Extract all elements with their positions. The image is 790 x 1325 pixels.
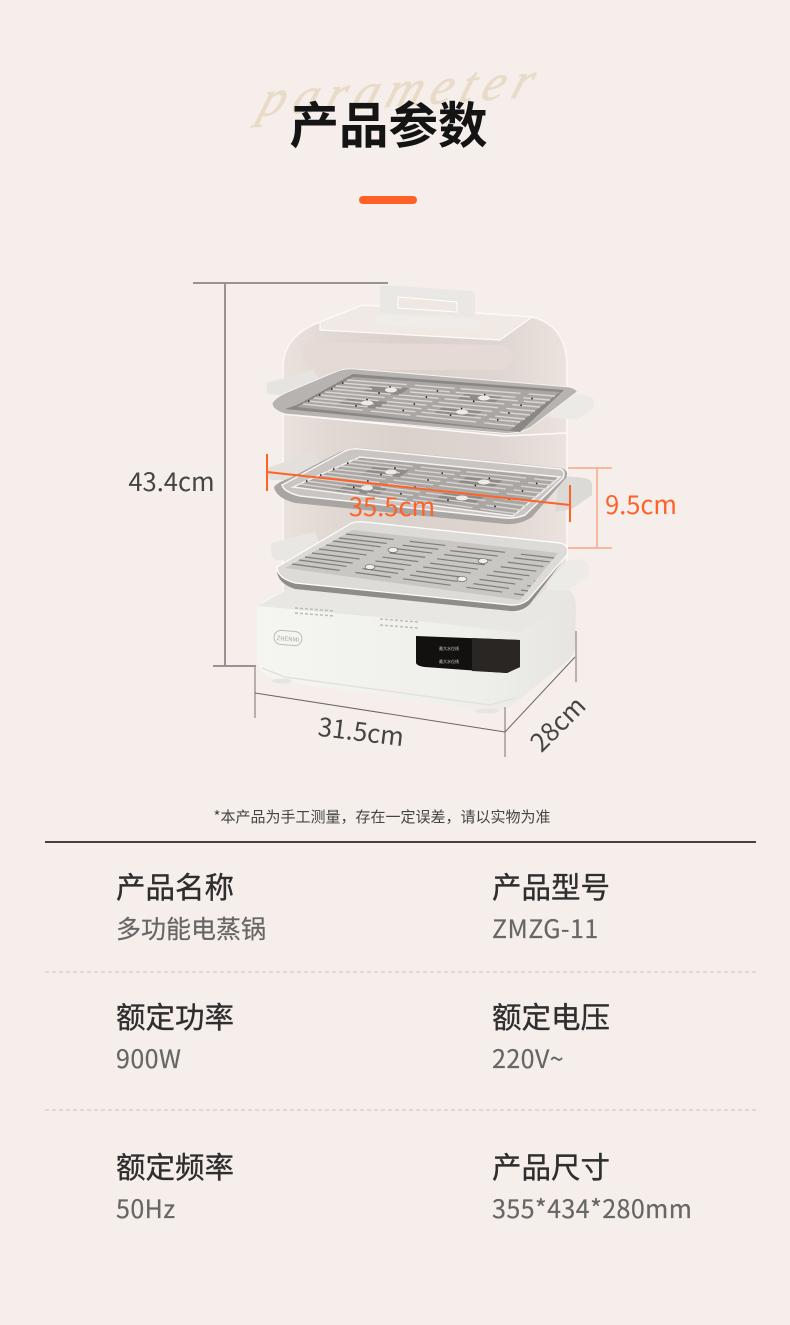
spec: rated frequency: 50Hz [116, 1190, 176, 1226]
water tank window [416, 636, 520, 673]
plate pin dots [306, 463, 551, 510]
height dimension 43.4cm: 43.4cm [128, 462, 215, 499]
inner width dimension 35.5cm [267, 454, 570, 524]
plate slots [292, 534, 554, 595]
inner width dimension 35.5cm: 35.5cm [349, 487, 435, 524]
accent bar [359, 196, 417, 204]
brand badge [273, 630, 303, 646]
lower front lid edge [283, 414, 567, 436]
tier height dimension 9.5cm: 9.5cm [605, 486, 677, 522]
spec: model: 产品型号 [492, 865, 610, 907]
tray plate [297, 377, 560, 430]
spec: rated voltage: 额定电压 [492, 995, 610, 1037]
title block [249, 52, 551, 158]
lid top surface [320, 305, 532, 340]
left grip [267, 370, 320, 395]
plate hole panels [336, 467, 503, 504]
spec: product size: 355*434*280mm [492, 1190, 692, 1226]
spec: product name: 产品名称 [116, 865, 234, 907]
plate holes [361, 388, 490, 414]
right grip [547, 559, 589, 590]
right grip [555, 476, 592, 512]
tier 1 tray [267, 369, 594, 433]
top divider [45, 841, 756, 843]
script watermark: parameter [249, 52, 551, 128]
steamer product illustration [257, 285, 594, 714]
base lower trim [262, 668, 515, 705]
steamer body and lid dome [283, 305, 567, 600]
measurement note: *本产品为手工测量，存在一定误差，请以实物为准 [213, 806, 551, 827]
spec: rated frequency [116, 1145, 234, 1226]
spec: product size [492, 1145, 692, 1226]
spec: product size: 产品尺寸 [492, 1145, 610, 1187]
lid handle [375, 285, 480, 330]
plate hole panels [336, 385, 503, 417]
tray rim [277, 522, 568, 611]
tier 2 tray [267, 448, 592, 524]
left grip [267, 452, 320, 480]
depth dimension 28cm: 28cm [521, 687, 593, 759]
base unit [257, 588, 576, 714]
lid inner highlight band [303, 342, 512, 370]
spec: rated frequency: 额定频率 [116, 1145, 234, 1187]
tray rim [272, 369, 577, 433]
spec: model: ZMZG-11 [492, 910, 599, 946]
heading: 产品参数 [290, 87, 488, 158]
left grip [271, 532, 320, 560]
base top surface [258, 588, 574, 633]
brand badge: ZHENMI [276, 633, 300, 644]
spec: model [492, 865, 610, 946]
spec: rated power: 额定功率 [116, 995, 234, 1037]
spec: product name: 多功能电蒸锅 [116, 910, 266, 946]
spec: rated voltage [492, 995, 610, 1076]
tier 3 tray [271, 522, 589, 611]
base shell [257, 588, 576, 711]
height dimension 43.4cm [128, 283, 388, 666]
plate pin dots [308, 383, 550, 422]
base feet [272, 678, 499, 714]
water tank window: 最大水位线 [439, 658, 459, 665]
plate holes [361, 470, 490, 500]
tray plate [285, 530, 558, 600]
plate holes [365, 548, 488, 582]
plate slots [300, 460, 555, 514]
right grip [547, 393, 594, 420]
spec: product name [116, 865, 266, 946]
width dimension 31.5cm [255, 666, 505, 757]
tray plate [293, 457, 560, 516]
spec: rated power: 900W [116, 1040, 181, 1076]
tier height dimension 9.5cm [568, 468, 677, 548]
tray rim [274, 448, 567, 524]
control panel marks [295, 608, 418, 628]
depth dimension 28cm [505, 631, 593, 759]
plate slots [303, 380, 555, 426]
spec: rated voltage: 220V~ [492, 1040, 564, 1076]
spec: rated power [116, 995, 234, 1076]
width dimension 31.5cm: 31.5cm [316, 707, 406, 754]
water tank window: 最大水位线 [439, 645, 459, 652]
